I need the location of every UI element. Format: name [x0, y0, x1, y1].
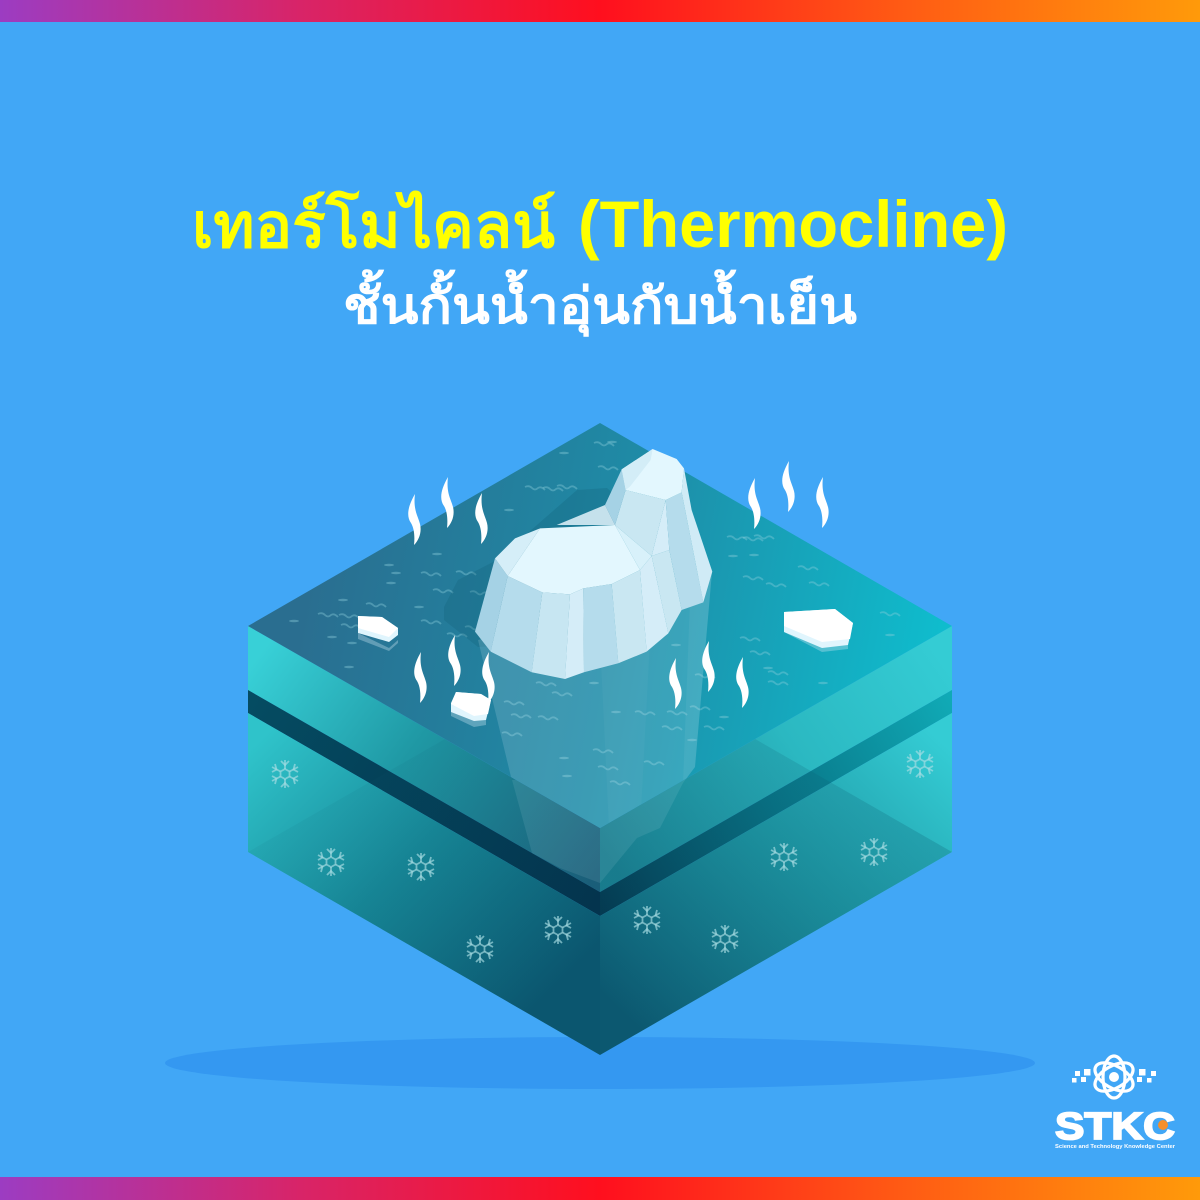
ocean block illustration — [248, 423, 952, 1055]
steam group: top left — [408, 477, 488, 545]
thermocline band left — [248, 690, 600, 916]
warm layer left face — [248, 626, 600, 892]
thermocline band right — [600, 690, 952, 916]
title: (Thermocline) — [578, 187, 1008, 261]
warm layer right face — [600, 626, 952, 892]
steam group: lower left — [414, 635, 495, 703]
water ripples — [289, 441, 900, 785]
logo: orange dot — [1158, 1120, 1168, 1130]
title: เทอร์โมไคลน์ — [192, 189, 556, 261]
water surface — [248, 423, 952, 828]
iceberg shadow on water — [444, 488, 620, 647]
floe: left — [358, 616, 398, 651]
iceberg — [475, 449, 712, 679]
submerged iceberg through water surface — [478, 573, 712, 828]
ice floes — [358, 609, 853, 727]
sea floor seen through the water — [685, 739, 952, 942]
steam group: top right — [748, 461, 829, 529]
floe: right — [784, 609, 853, 652]
cold layer left face — [248, 713, 600, 1055]
ground shadow — [165, 1037, 1035, 1089]
logo: STKC — [1055, 1056, 1176, 1150]
logo: atom mark — [1072, 1056, 1156, 1098]
bottom gradient bar — [0, 1177, 1200, 1200]
snowflakes in the cold layer — [272, 750, 933, 963]
floe: middle — [451, 692, 491, 727]
steam group: lower right — [669, 641, 749, 709]
cold layer right face — [600, 713, 952, 1055]
submerged iceberg through side faces — [512, 779, 686, 883]
logo: wordmark: STKC — [1055, 1106, 1175, 1148]
logo: tagline: Science and Technology Knowledge Center — [1055, 1144, 1176, 1150]
top gradient bar — [0, 0, 1200, 22]
subtitle: ชั้นกั้นน้ำอุ่นกับน้ำเย็น — [343, 269, 857, 337]
